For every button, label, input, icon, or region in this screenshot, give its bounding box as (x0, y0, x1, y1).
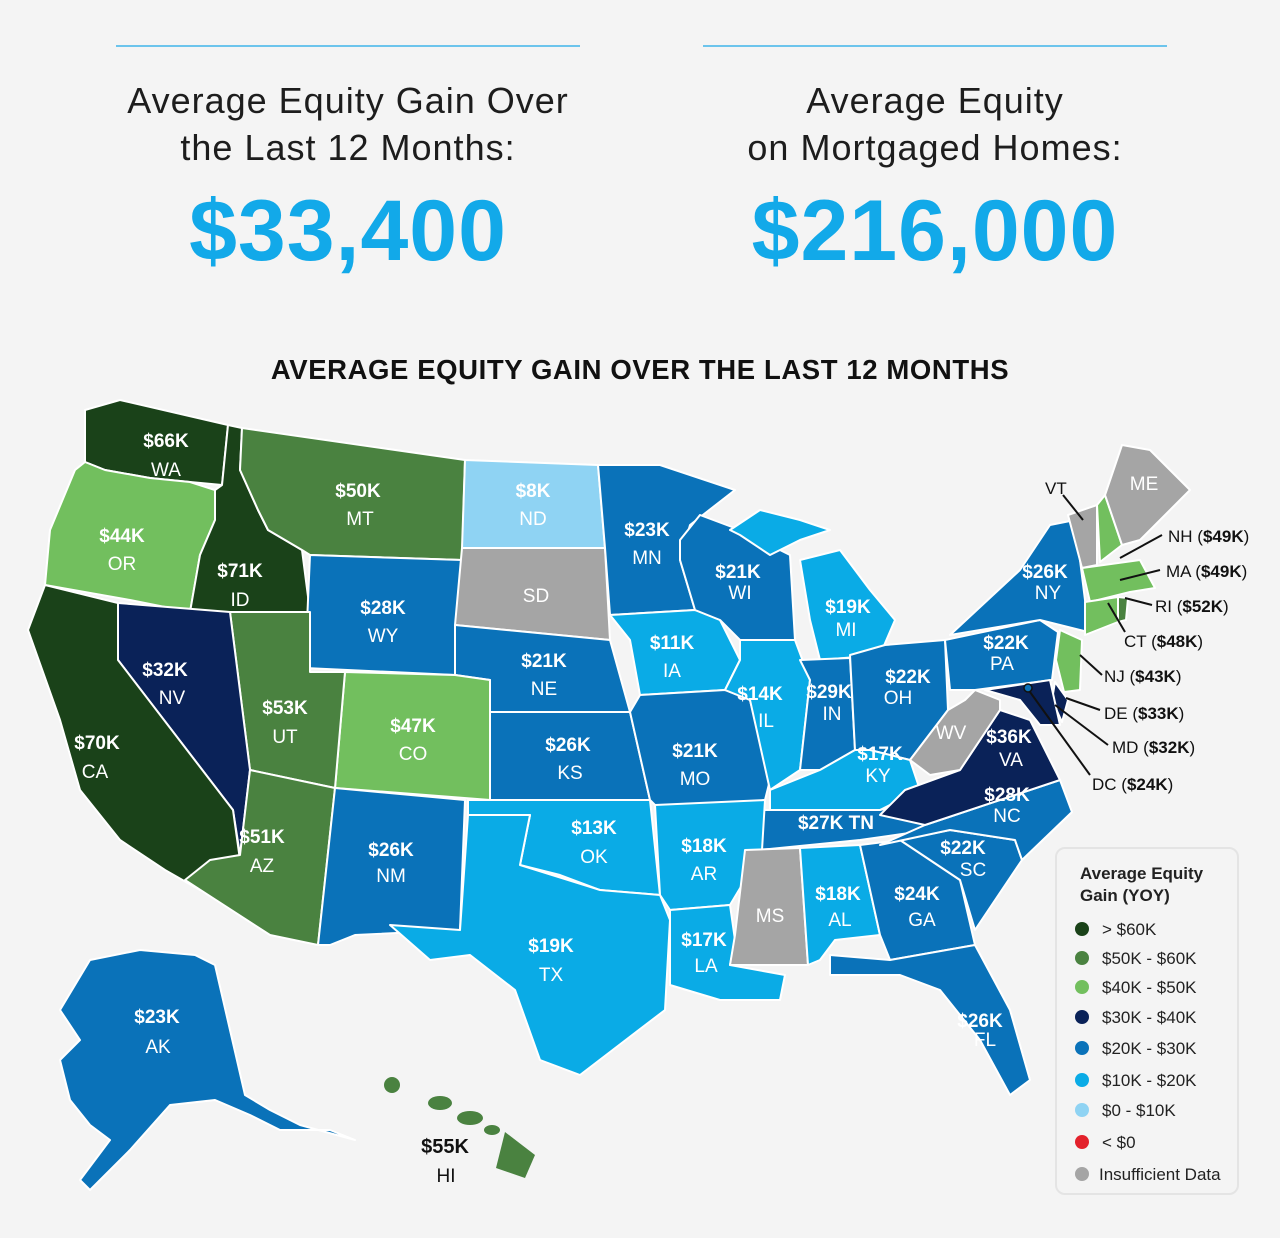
map: NH ($49K) (1168, 527, 1249, 546)
state labels: $21K (521, 651, 567, 672)
state labels: AL (828, 910, 852, 931)
state labels: NC (993, 806, 1021, 827)
state labels: $47K (390, 716, 436, 737)
state labels: $36K (986, 727, 1032, 748)
legend: $40K - $50K (1102, 978, 1197, 997)
state labels: GA (908, 910, 936, 931)
map: NJ ($43K) (1104, 667, 1181, 686)
map: RI ($52K) (1155, 597, 1229, 616)
legend: Average Equity (1080, 864, 1203, 883)
state labels: $26K (545, 735, 591, 756)
state labels: OH (884, 688, 912, 709)
state labels: WI (728, 583, 752, 604)
state labels: MI (835, 620, 857, 641)
map title: AVERAGE EQUITY GAIN OVER THE LAST 12 MONTHS (271, 354, 1009, 385)
state labels: $51K (239, 827, 285, 848)
state labels: $13K (571, 818, 617, 839)
state labels: LA (694, 956, 718, 977)
state labels: WA (151, 460, 181, 481)
state labels: $26K (368, 840, 414, 861)
state labels: MT (346, 509, 374, 530)
value: 33,400: $33,400 (189, 183, 507, 279)
map: CT ($48K) (1124, 632, 1203, 651)
legend: > $60K (1102, 920, 1157, 939)
heading: avg equity mortgaged (747, 80, 1123, 168)
legend: $20K - $30K (1102, 1039, 1197, 1058)
state labels: $28K (360, 598, 406, 619)
value: 216,000: $216,000 (752, 183, 1118, 279)
state labels: CA (82, 762, 109, 783)
state labels: ID (230, 590, 250, 611)
state labels: AZ (250, 856, 275, 877)
heading: avg equity mortgaged: on Mortgaged Homes: (747, 127, 1123, 168)
state labels: KY (865, 766, 891, 787)
legend: Gain (YOY) (1080, 886, 1170, 905)
state labels: $28K (984, 785, 1030, 806)
state labels: $23K (134, 1007, 180, 1028)
map: VT (1045, 479, 1067, 498)
heading: avg equity gain: Average Equity Gain Over (127, 80, 569, 121)
state labels: $26K (957, 1011, 1003, 1032)
state labels: $19K (825, 597, 871, 618)
state labels: $50K (335, 481, 381, 502)
state labels: UT (272, 727, 298, 748)
state labels: $22K (940, 838, 986, 859)
state labels: OR (108, 554, 136, 575)
map: $55K (421, 1136, 469, 1158)
state labels: NM (376, 866, 406, 887)
legend: $10K - $20K (1102, 1071, 1197, 1090)
heading: avg equity gain: the Last 12 Months: (180, 127, 516, 168)
state labels: SD (523, 586, 549, 607)
state labels: $8K (516, 481, 551, 502)
state labels: $21K (715, 562, 761, 583)
state labels: FL (974, 1030, 996, 1051)
legend: $0 - $10K (1102, 1101, 1176, 1120)
state labels: NE (531, 679, 557, 700)
state labels: $22K (983, 633, 1029, 654)
state labels: CO (399, 744, 427, 765)
state labels: PA (990, 654, 1014, 675)
state labels: $17K (857, 744, 903, 765)
state labels: MN (632, 548, 662, 569)
map: HI (436, 1166, 456, 1187)
state labels: $29K (806, 682, 852, 703)
state labels: NY (1035, 583, 1062, 604)
state labels: $17K (681, 930, 727, 951)
state labels: $24K (894, 884, 940, 905)
map: DE ($33K) (1104, 704, 1184, 723)
heading: avg equity mortgaged: Average Equity (806, 80, 1064, 121)
map: MD ($32K) (1112, 738, 1195, 757)
state labels: $18K (681, 836, 727, 857)
state labels: AR (691, 864, 717, 885)
state labels: $53K (262, 698, 308, 719)
state labels: TX (539, 965, 563, 986)
state labels: $27K TN (798, 813, 874, 834)
state labels: IL (758, 711, 774, 732)
state labels (74, 431, 1158, 1058)
state labels: ME (1130, 474, 1158, 495)
state labels: $19K (528, 936, 574, 957)
callout lines (1030, 495, 1162, 775)
state labels: $71K (217, 561, 263, 582)
state labels: WV (936, 723, 967, 744)
state labels: NV (159, 688, 186, 709)
state labels: WY (368, 626, 399, 647)
map: MA ($49K) (1166, 562, 1247, 581)
state labels: $32K (142, 660, 188, 681)
state labels: OK (580, 847, 608, 868)
state labels: $23K (624, 520, 670, 541)
map: DC ($24K) (1092, 775, 1173, 794)
legend: < $0 (1102, 1133, 1136, 1152)
state labels: $44K (99, 526, 145, 547)
state labels: $18K (815, 884, 861, 905)
state labels: IN (822, 704, 842, 725)
state labels: $70K (74, 733, 120, 754)
state labels: $14K (737, 684, 783, 705)
state labels: IA (663, 661, 681, 682)
legend: $30K - $40K (1102, 1008, 1197, 1027)
state labels: $21K (672, 741, 718, 762)
state labels: ND (519, 509, 547, 530)
legend (1055, 847, 1239, 1195)
legend: Insufficient Data (1099, 1165, 1221, 1184)
state labels: $22K (885, 667, 931, 688)
heading: avg equity gain (127, 80, 569, 168)
state labels: SC (960, 860, 986, 881)
state labels: VA (999, 750, 1023, 771)
state labels: AK (145, 1037, 171, 1058)
legend: $50K - $60K (1102, 949, 1197, 968)
state labels: $66K (143, 431, 189, 452)
state labels: $11K (650, 633, 694, 654)
state labels: MS (756, 906, 784, 927)
state labels: $26K (1022, 562, 1068, 583)
state labels: MO (680, 769, 710, 790)
state labels: KS (557, 763, 583, 784)
